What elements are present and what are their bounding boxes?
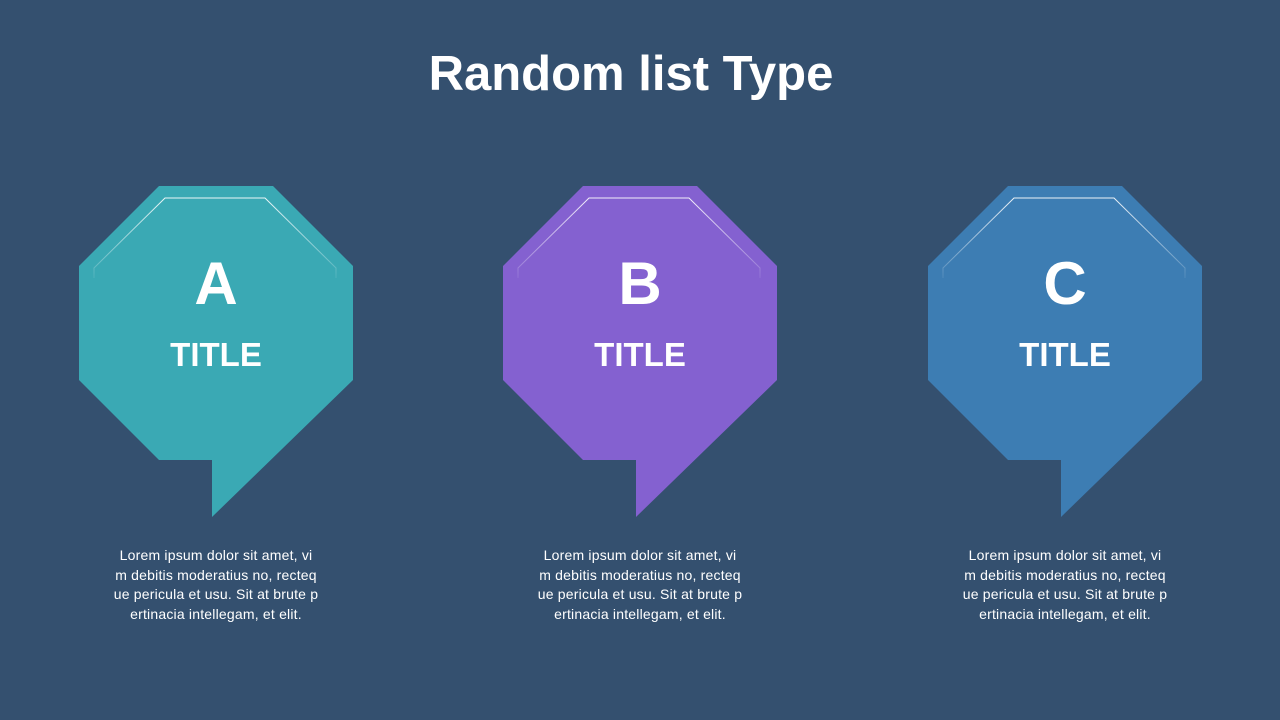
panel: B <box>503 186 777 517</box>
panel: C <box>928 186 1202 517</box>
text block B <box>538 547 742 622</box>
panel: C: TITLE <box>1019 336 1111 373</box>
text block B: ue pericula et usu. Sit at brute p <box>538 586 742 602</box>
text block A: m debitis moderatius no, recteq <box>115 566 317 582</box>
text block A: ue pericula et usu. Sit at brute p <box>114 586 318 602</box>
text block B: ertinacia intellegam, et elit. <box>554 606 726 622</box>
panel: A: A <box>194 250 238 317</box>
title: Random list Type <box>429 47 833 101</box>
text block C: ertinacia intellegam, et elit. <box>979 606 1151 622</box>
panel: A: TITLE <box>170 336 262 373</box>
text block B: m debitis moderatius no, recteq <box>539 566 741 582</box>
text block A: Lorem ipsum dolor sit amet, vi <box>120 547 312 563</box>
text block C: m debitis moderatius no, recteq <box>964 566 1166 582</box>
panel: B: TITLE <box>594 336 686 373</box>
text block C: ue pericula et usu. Sit at brute p <box>963 586 1167 602</box>
panel: B: B <box>618 250 662 317</box>
text block A <box>114 547 318 622</box>
text block B: Lorem ipsum dolor sit amet, vi <box>544 547 736 563</box>
panel: C: C <box>1043 250 1087 317</box>
text block A: ertinacia intellegam, et elit. <box>130 606 302 622</box>
text block C: Lorem ipsum dolor sit amet, vi <box>969 547 1161 563</box>
text block C <box>963 547 1167 622</box>
panel: A <box>79 186 353 517</box>
